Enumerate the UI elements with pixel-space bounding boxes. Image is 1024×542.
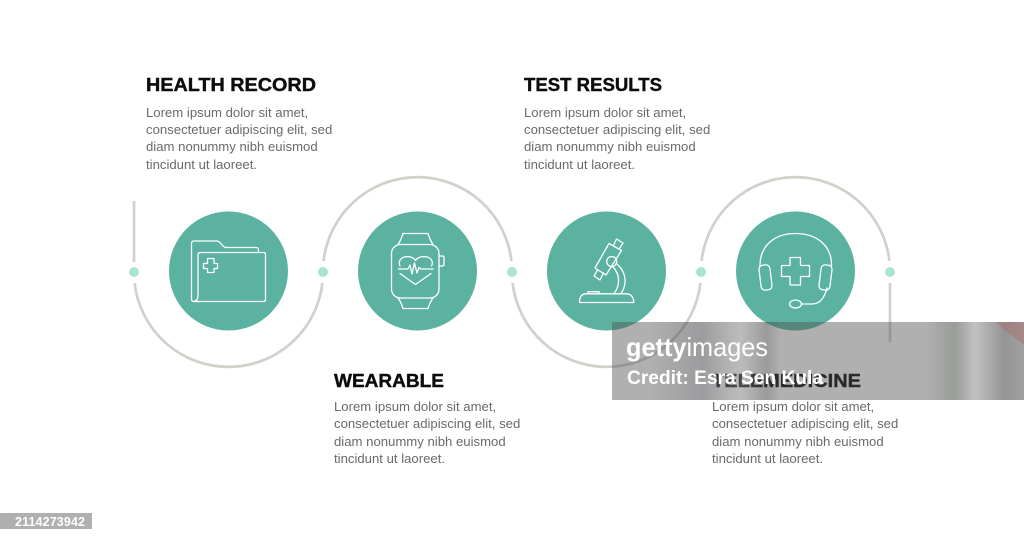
text block: health record: tincidunt ut laoreet. xyxy=(146,157,257,172)
icon: medical headset xyxy=(736,212,855,330)
text block: health record: consectetuer adipiscing elit, sed xyxy=(146,122,332,137)
image id tag xyxy=(0,513,92,529)
heading: wearable: WEARABLE xyxy=(334,371,444,391)
text block: telemedicine: consectetuer adipiscing elit, sed xyxy=(712,416,898,431)
text block: health record: Lorem ipsum dolor sit amet, xyxy=(146,105,308,120)
connector: serpentine timeline path xyxy=(134,177,890,367)
text block: telemedicine: diam nonummy nibh euismod xyxy=(712,434,884,449)
icon: microscope xyxy=(547,212,666,330)
text block: wearable: Lorem ipsum dolor sit amet, xyxy=(334,399,496,414)
text block: telemedicine: Lorem ipsum dolor sit amet, xyxy=(712,399,874,414)
text block: test results: diam nonummy nibh euismod xyxy=(524,139,696,154)
heading: telemedicine: TELEMEDICINE xyxy=(712,371,861,391)
text block: wearable: consectetuer adipiscing elit, sed xyxy=(334,416,520,431)
text block: wearable: diam nonummy nibh euismod xyxy=(334,434,506,449)
panel: wearable xyxy=(334,371,520,466)
watermark text: getty images: gettyimages xyxy=(626,332,768,362)
heading: health record: HEALTH RECORD xyxy=(146,75,316,95)
text block: test results: Lorem ipsum dolor sit amet, xyxy=(524,105,686,120)
text block: health record: diam nonummy nibh euismod xyxy=(146,139,318,154)
timeline dots xyxy=(129,267,895,277)
image id number: 2114273942 xyxy=(15,515,85,529)
icon: smartwatch with heart xyxy=(358,212,477,330)
text block: test results: consectetuer adipiscing elit, sed xyxy=(524,122,710,137)
watermark text: credit: Credit: Esra Sen Kula xyxy=(627,368,823,389)
panel: test results xyxy=(524,75,710,172)
icon: folder with medical cross xyxy=(169,212,288,330)
text block: test results: tincidunt ut laoreet. xyxy=(524,157,635,172)
watermark: getty images banner xyxy=(612,322,1024,400)
heading: test results: TEST RESULTS xyxy=(524,75,662,95)
text block: telemedicine: tincidunt ut laoreet. xyxy=(712,451,823,466)
text block: wearable: tincidunt ut laoreet. xyxy=(334,451,445,466)
panel: health record xyxy=(146,75,332,172)
panel: telemedicine xyxy=(712,371,898,466)
